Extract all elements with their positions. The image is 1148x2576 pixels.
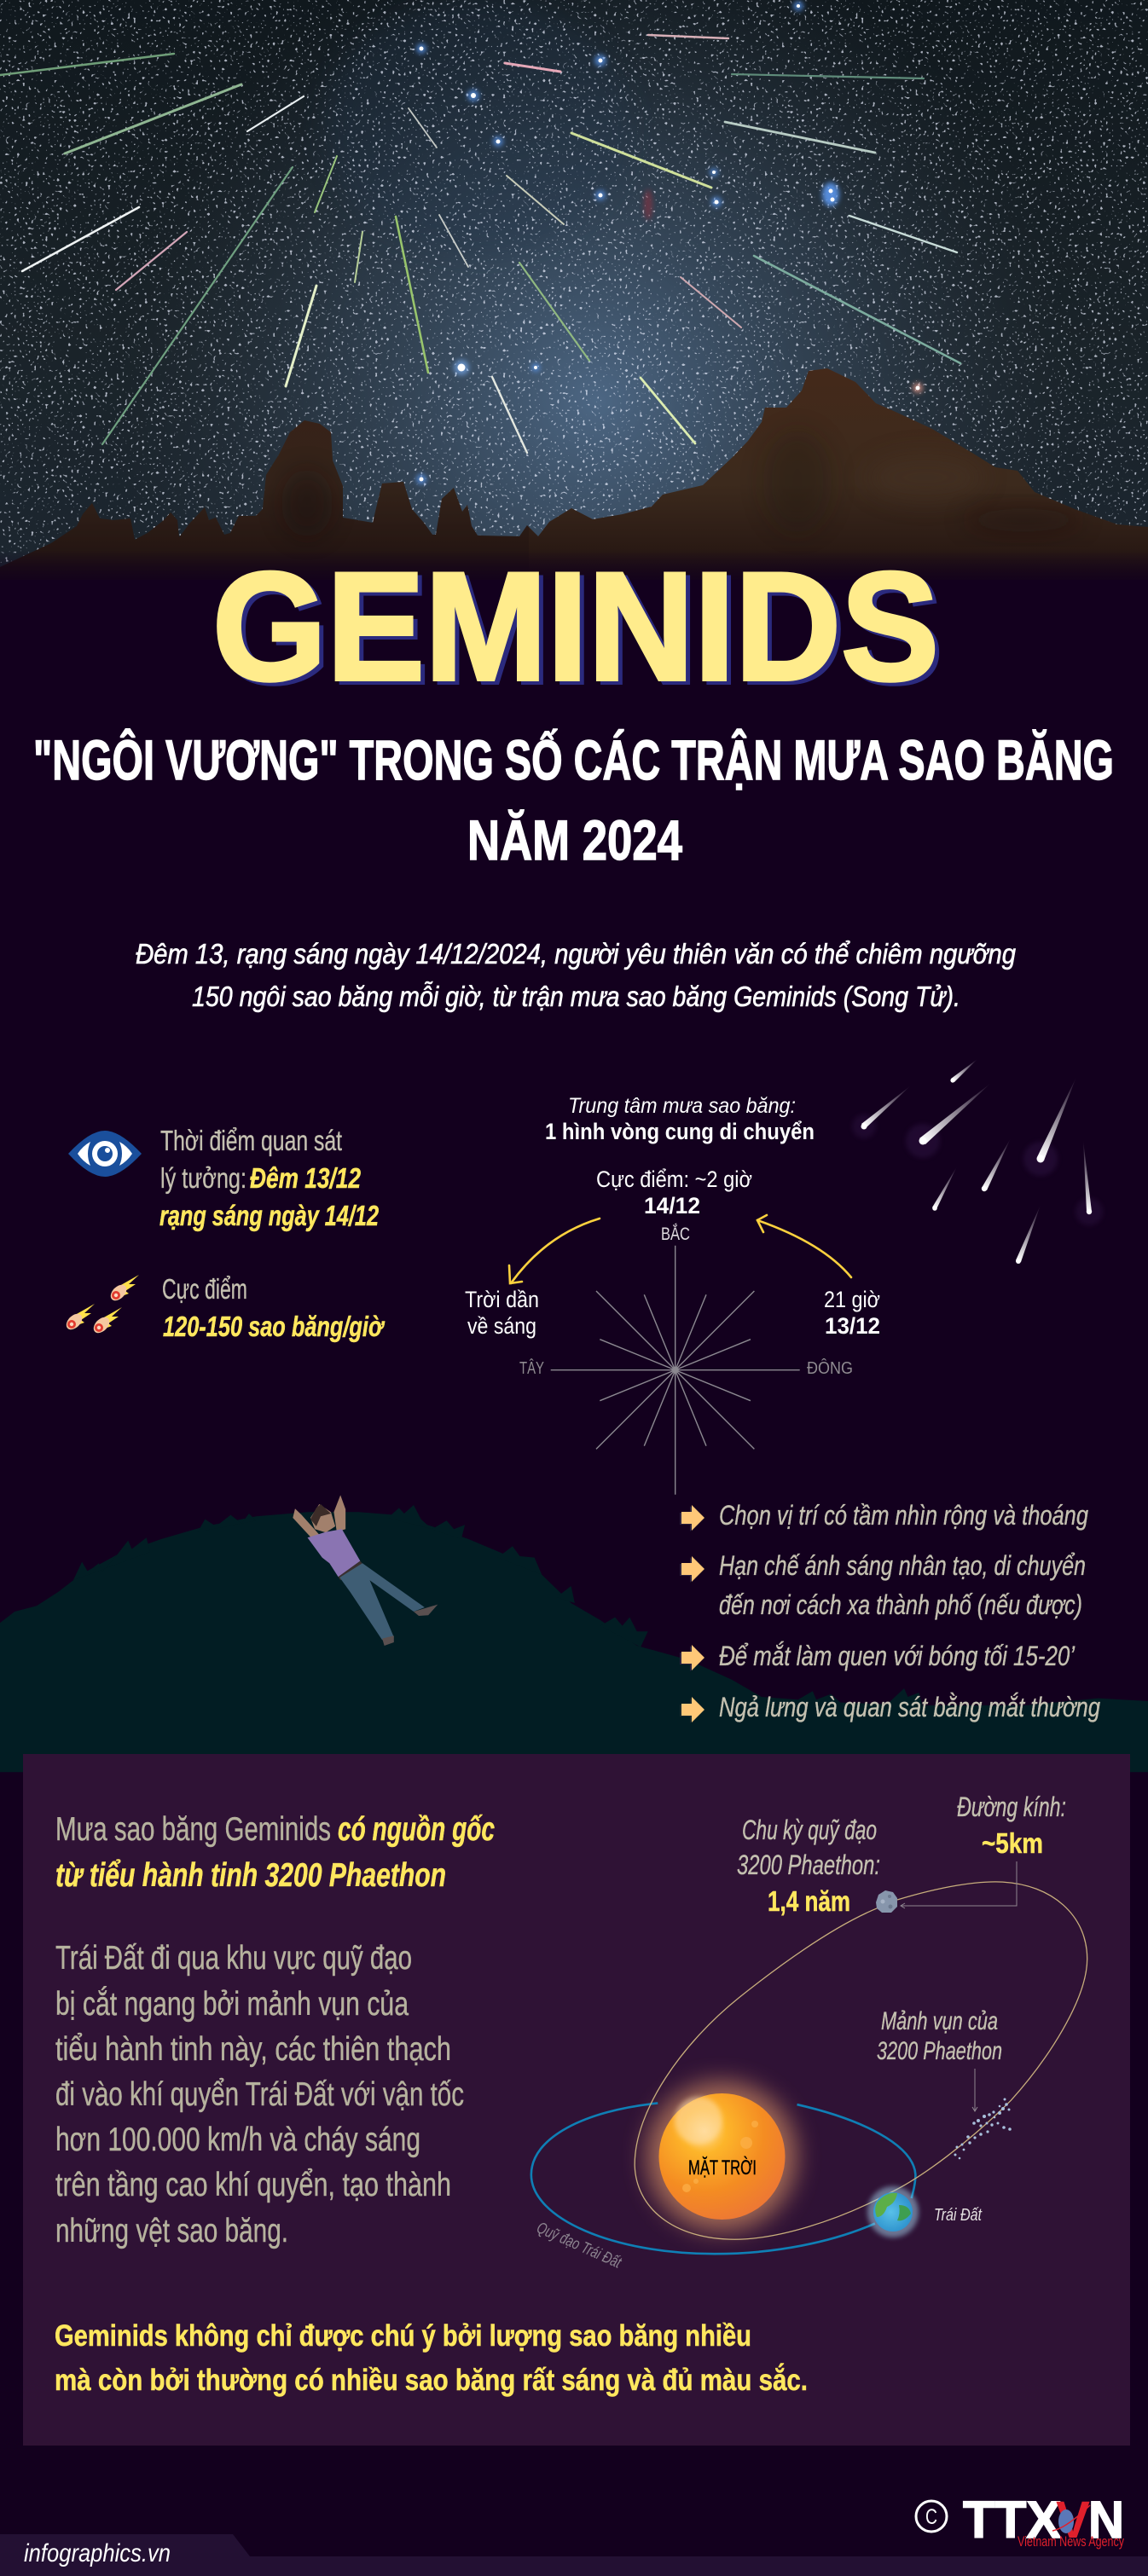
tip 3: Để mắt làm quen với bóng tối 15-20’ <box>719 1641 1076 1671</box>
text: peak rate: 120-150 sao băng/giờ <box>163 1311 386 1342</box>
panel conclusion text: Geminids không chỉ được chú ý bởi lượng sao băng nhiều <box>55 2319 751 2353</box>
agency wordmark: V <box>1056 2491 1090 2549</box>
text: ideal viewing time: rạng sáng ngày 14/12 <box>159 1200 379 1231</box>
diameter pointer arrow <box>901 1861 1017 1908</box>
globe on logo <box>1052 2505 1090 2533</box>
21h label: 21 giờ <box>824 1287 880 1312</box>
panel conclusion text: mà còn bởi thường có nhiều sao băng rất sáng và đủ màu sắc. <box>55 2363 808 2397</box>
21h label: 13/12 <box>825 1313 880 1339</box>
illustration: falling meteors <box>852 1059 1103 1264</box>
arc arrow: toward peak <box>757 1215 851 1277</box>
logo: TTXVN copyright <box>916 2491 1124 2550</box>
panel body text: hơn 100.000 km/h và cháy sáng <box>55 2122 420 2158</box>
text: ideal viewing time: Đêm 13/12 <box>250 1162 362 1194</box>
21h label <box>824 1287 880 1339</box>
panel body text: đi vào khí quyển Trái Đất với vận tốc <box>55 2076 464 2113</box>
text: peak rate: Cực điểm <box>162 1273 247 1305</box>
agency wordmark <box>963 2491 1124 2549</box>
radiant chart heading: Trung tâm mưa sao băng: <box>568 1094 796 1118</box>
orbital period label: 1,4 năm <box>768 1885 850 1917</box>
footer bar <box>0 2534 1148 2576</box>
fade into page background <box>0 550 1148 593</box>
panel heading text: có nguồn gốc <box>338 1811 495 1848</box>
panel body text: bị cắt ngang bởi mảnh vụn của <box>55 1986 409 2023</box>
agency wordmark: N <box>1088 2491 1124 2549</box>
west label: TÂY <box>519 1358 544 1378</box>
sun <box>658 2093 785 2220</box>
radiant chart heading <box>545 1094 815 1144</box>
chart: radiant arc and compass <box>465 1166 880 1495</box>
peak label <box>596 1166 752 1219</box>
debris label <box>877 2007 1002 2065</box>
diameter label: Đường kính: <box>957 1792 1066 1822</box>
compass rays <box>551 1246 800 1495</box>
text: ideal viewing time <box>159 1125 379 1231</box>
tip 2 <box>680 1550 1086 1620</box>
panel heading text: Mưa sao băng Geminids <box>55 1811 331 1848</box>
panel body text: tiểu hành tinh này, các thiên thạch <box>55 2031 451 2068</box>
panel conclusion text <box>55 2319 808 2397</box>
diagram: orbits of Earth and 3200 Phaethon <box>531 1792 1087 2272</box>
north label: BẮC <box>661 1224 690 1244</box>
illustration: person lying on hill <box>293 1495 438 1646</box>
orbital period label: Chu kỳ quỹ đạo <box>742 1815 877 1845</box>
bright stars <box>416 1 923 484</box>
text: ideal viewing time: lý tưởng: <box>160 1162 246 1194</box>
copyright mark <box>916 2501 947 2532</box>
panel body text: những vệt sao băng. <box>55 2213 288 2249</box>
orbital period label: 3200 Phaethon: <box>737 1850 880 1880</box>
Earth orbit <box>531 2103 915 2254</box>
panel body text: trên tầng cao khí quyển, tạo thành <box>55 2167 451 2203</box>
east label: ĐÔNG <box>807 1358 853 1378</box>
debris cloud <box>954 2098 1012 2159</box>
mountain silhouette <box>0 358 1148 580</box>
title: GEMINIDS: GEMINIDS <box>212 541 939 713</box>
Earth orbit label: Quỹ đạo Trái Đất <box>534 2219 624 2272</box>
meteor streaks <box>0 35 960 453</box>
intro text: Đêm 13, rạng sáng ngày 14/12/2024, người yêu thiên văn có thể chiêm ngưỡng <box>136 938 1017 970</box>
Earth <box>867 2186 919 2237</box>
copyright mark: C <box>925 2505 937 2529</box>
diameter label: ~5km <box>982 1827 1043 1859</box>
title: GEMINIDS: GEMINIDS <box>217 544 943 716</box>
photo: starry night sky with meteor shower and mountains <box>0 0 1148 593</box>
debris pointer arrow <box>972 2069 977 2111</box>
arc arrow: toward dawn <box>509 1219 600 1283</box>
footer website text: infographics.vn <box>24 2539 171 2567</box>
text: peak rate <box>162 1273 386 1342</box>
panel: Phaethon origin <box>23 1754 1130 2446</box>
Earth label: Trái Đất <box>934 2206 983 2225</box>
intro text <box>136 938 1017 1012</box>
icon: three meteors <box>63 1275 139 1336</box>
peak label: 14/12 <box>644 1193 700 1219</box>
panel body text <box>55 1940 464 2249</box>
peak label: Cực điểm: ~2 giờ <box>596 1166 752 1192</box>
text: ideal viewing time: Thời điểm quan sát <box>160 1125 342 1156</box>
panel heading text <box>55 1811 495 1894</box>
asteroid Phaethon <box>876 1890 897 1913</box>
dawn label: về sáng <box>467 1313 536 1339</box>
sun: MẶT TRỜI <box>688 2156 757 2179</box>
debris label: 3200 Phaethon <box>877 2037 1002 2065</box>
orbital period label <box>737 1815 880 1917</box>
tips list <box>680 1500 1100 1723</box>
Phaethon orbit <box>635 1882 1087 2239</box>
radiant chart heading: 1 hình vòng cung di chuyển <box>545 1119 815 1144</box>
subtitle heading <box>33 728 1114 871</box>
sun glow <box>646 2081 797 2232</box>
diameter label <box>957 1792 1066 1859</box>
dawn label: Trời dần <box>465 1287 539 1312</box>
subtitle heading: NĂM 2024 <box>467 808 682 871</box>
illustration: grassy hill <box>0 1505 1148 1772</box>
panel body text: Trái Đất đi qua khu vực quỹ đạo <box>55 1940 412 1977</box>
icon: eye <box>68 1131 142 1177</box>
panel heading text: từ tiểu hành tinh 3200 Phaethon <box>55 1857 446 1894</box>
dawn label <box>465 1287 539 1339</box>
agency wordmark: TTX <box>963 2491 1061 2549</box>
intro text: 150 ngôi sao băng mỗi giờ, từ trận mưa sao băng Geminids (Song Tử). <box>192 981 960 1012</box>
debris label: Mảnh vụn của <box>881 2007 998 2035</box>
